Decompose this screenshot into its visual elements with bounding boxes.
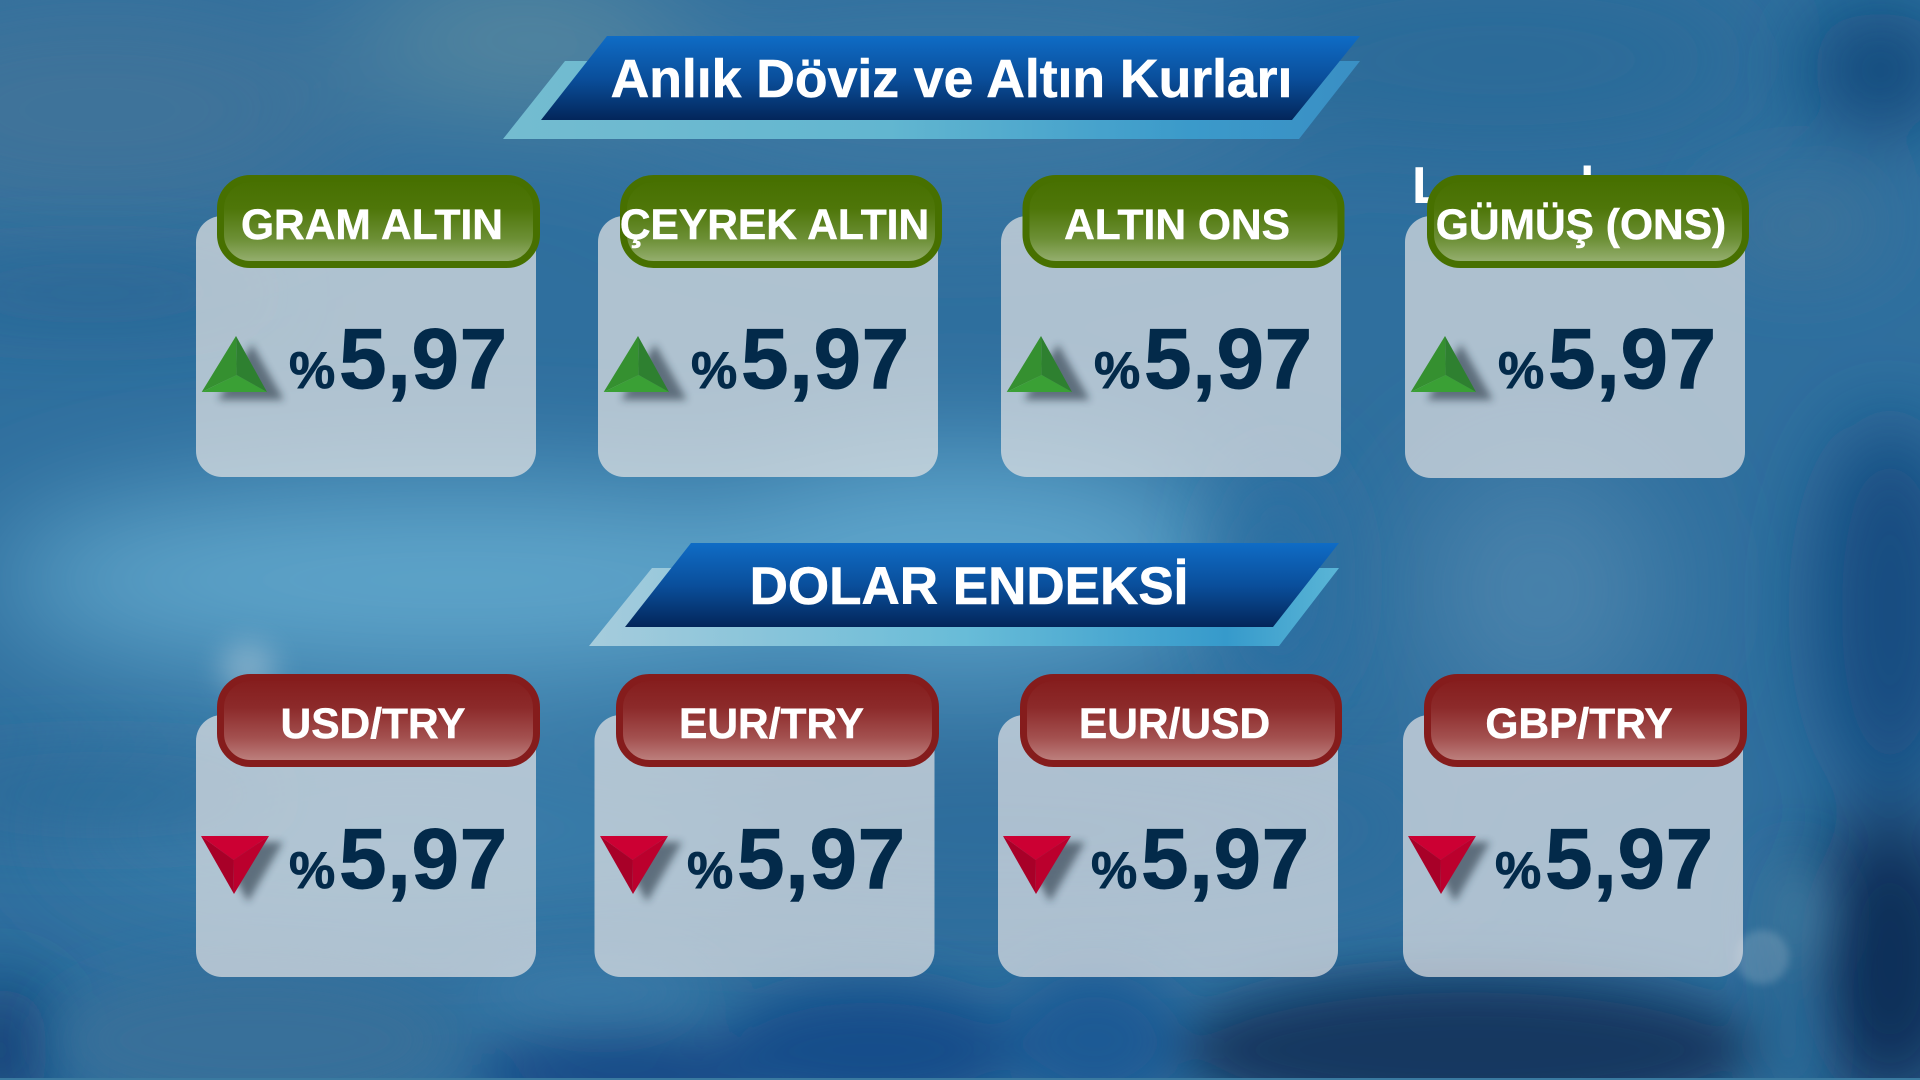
- value: %: [289, 842, 335, 900]
- tab label: USD/TRY: [281, 701, 465, 748]
- panel: Gram Altın: [196, 178, 536, 477]
- tab label: EUR/USD: [1079, 701, 1270, 748]
- value: 5,97: [339, 312, 508, 407]
- value: 5,97: [1548, 312, 1717, 407]
- value: 5,97: [1545, 812, 1714, 907]
- icon: up arrow: [202, 336, 284, 400]
- hidden heading fragments behind the Gümüş tab: l: [1580, 157, 1594, 215]
- tab: [620, 678, 936, 764]
- icon: up arrow: [1411, 336, 1493, 400]
- tab: [624, 178, 938, 264]
- value: %: [1498, 342, 1544, 400]
- tab label: ÇEYREK ALTIN: [620, 202, 929, 249]
- tab label: ALTIN ONS: [1064, 202, 1290, 249]
- icon: down arrow: [201, 836, 283, 902]
- value: 5,97: [741, 312, 910, 407]
- value: 5,97: [1144, 312, 1313, 407]
- tab: [1428, 678, 1744, 764]
- panel: EUR/USD: [998, 678, 1338, 977]
- value: %: [1091, 842, 1137, 900]
- icon: up arrow: [604, 336, 687, 400]
- panel: GBP/TRY: [1403, 678, 1744, 977]
- title text: Anlık Döviz ve Altın Kurları: [611, 50, 1292, 109]
- value: 5,97: [339, 812, 508, 907]
- hidden heading fragments behind the Gümüş tab: [1412, 157, 1594, 215]
- tab label: EUR/TRY: [679, 701, 864, 748]
- background glow spot: right: [1735, 930, 1789, 984]
- icon: down arrow: [600, 836, 682, 902]
- value: %: [687, 842, 733, 900]
- tab: [1430, 178, 1746, 264]
- hidden heading fragments behind the Gümüş tab: L: [1412, 157, 1444, 215]
- value: %: [289, 342, 335, 400]
- icon: down arrow: [1003, 836, 1085, 902]
- tab: [1026, 178, 1341, 264]
- background glow spot: left: [220, 642, 276, 694]
- panel: USD/TRY: [196, 678, 536, 977]
- tab label: GBP/TRY: [1485, 701, 1673, 748]
- panel: Altın Ons: [1001, 178, 1341, 477]
- tab: [220, 678, 536, 764]
- section heading text: DOLAR ENDEKSİ: [750, 557, 1188, 616]
- icon: down arrow: [1408, 836, 1490, 902]
- title banner: Anlık Döviz ve Altın Kurları: [503, 36, 1360, 139]
- tab: [1024, 678, 1338, 764]
- tab label: GÜMÜŞ (ONS): [1436, 202, 1726, 249]
- tab label: GRAM ALTIN: [241, 202, 503, 249]
- icon: up arrow: [1007, 336, 1090, 400]
- panel: Çeyrek Altın: [598, 178, 938, 477]
- value: %: [1094, 342, 1140, 400]
- panel: EUR/TRY: [594, 678, 936, 977]
- value: %: [691, 342, 737, 400]
- panel: Gümüş (Ons): [1405, 178, 1746, 478]
- tab: [220, 178, 536, 264]
- value: 5,97: [737, 812, 906, 907]
- section banner: Dolar Endeksi: [589, 543, 1339, 646]
- value: %: [1495, 842, 1541, 900]
- value: 5,97: [1141, 812, 1310, 907]
- bottom edge line: [0, 1078, 1920, 1080]
